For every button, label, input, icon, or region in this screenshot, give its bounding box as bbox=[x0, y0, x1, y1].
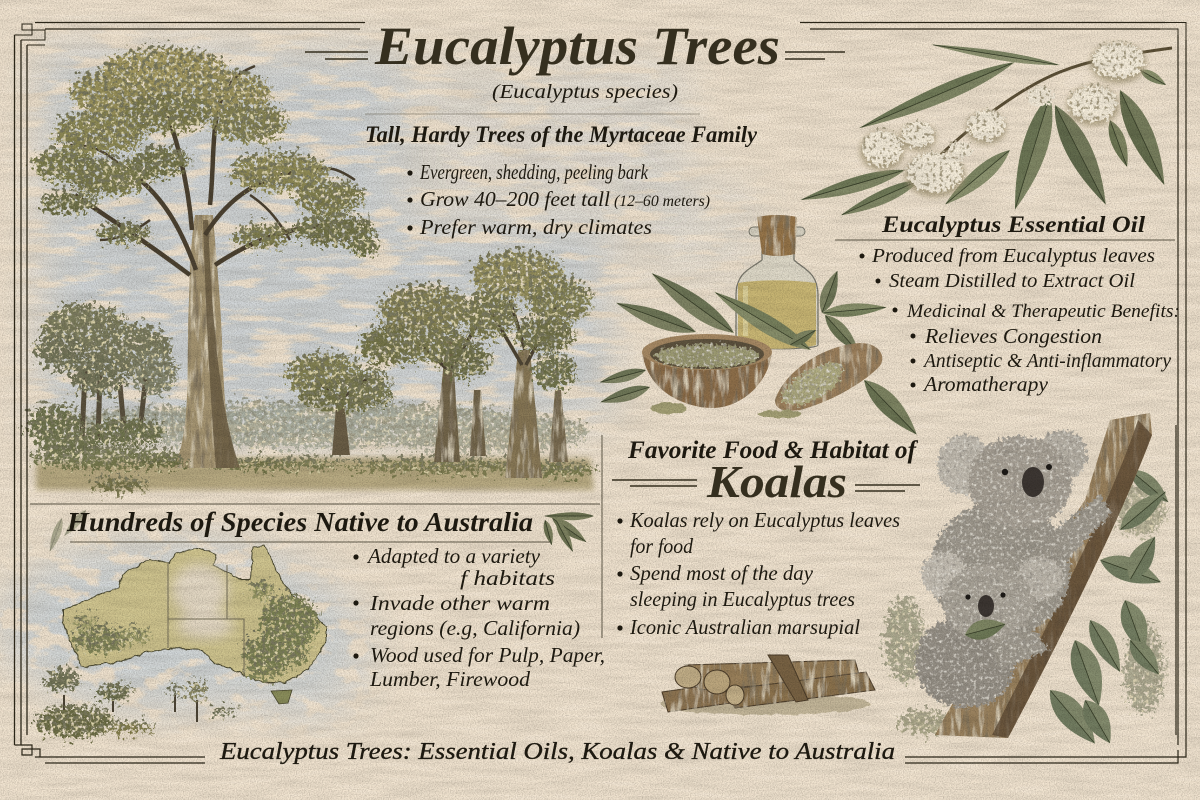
scattered seeds bbox=[650, 402, 802, 418]
branch bbox=[925, 48, 1172, 170]
text block: tall hardy trees: Evergreen, shedding, peeling bark bbox=[419, 160, 649, 184]
text block: species native to Australia: Invade other warm bbox=[369, 591, 550, 615]
text block: essential oil: Aromatherapy bbox=[922, 372, 1049, 396]
leaf sprig by heading bbox=[46, 508, 594, 554]
text block: essential oil: Antiseptic & Anti-inflammatory bbox=[922, 350, 1171, 372]
text block: species native to Australia: Lumber, Firewood bbox=[369, 667, 531, 691]
text block: tall hardy trees: Prefer warm, dry climates bbox=[419, 215, 652, 239]
sea wash bbox=[0, 526, 378, 728]
text block: essential oil: Produced from Eucalyptus leaves bbox=[871, 245, 1155, 267]
bottle bbox=[736, 215, 818, 349]
small landscape bbox=[35, 669, 237, 738]
text block: tall hardy trees bbox=[365, 122, 758, 239]
large eucalyptus bbox=[33, 48, 379, 468]
text block: species native to Australia bbox=[66, 507, 605, 691]
sky wash bbox=[24, 34, 749, 454]
trunk bbox=[935, 413, 1152, 738]
leaves bbox=[1041, 463, 1174, 751]
blossoms bbox=[862, 42, 1144, 192]
text block: essential oil: Relieves Congestion bbox=[924, 324, 1102, 348]
cork bbox=[757, 215, 797, 256]
text block: koalas: Koalas rely on Eucalyptus leaves bbox=[629, 508, 900, 532]
leaves bbox=[798, 40, 1176, 222]
illustration: eucalyptus landscape bbox=[27, 48, 598, 492]
text block: tall hardy trees: Grow 40–200 feet tall bbox=[420, 187, 610, 211]
map of Australia bbox=[35, 545, 326, 738]
ground bbox=[36, 458, 594, 490]
text block: koalas: Koalas bbox=[706, 456, 847, 507]
text block: species native to Australia: Adapted to a variety bbox=[366, 544, 541, 568]
mainland bbox=[63, 545, 326, 683]
scoop bbox=[775, 343, 882, 411]
inland cream bbox=[172, 564, 233, 639]
text block: species native to Australia: f habitats bbox=[460, 566, 555, 590]
shrubs at base bbox=[40, 432, 278, 468]
text block: tall hardy trees: Tall, Hardy Trees of the Myrtaceae Family bbox=[365, 122, 758, 147]
text block: koalas bbox=[612, 437, 920, 639]
front leaves bbox=[709, 285, 924, 441]
text block: species native to Australia: Wood used for Pulp, Paper, bbox=[370, 643, 605, 667]
illustration: eucalyptus branch with blossoms bbox=[798, 40, 1176, 222]
title: Eucalyptus Trees bbox=[374, 16, 780, 76]
blossom shadows bbox=[860, 43, 1146, 197]
footer caption: Eucalyptus Trees: Essential Oils, Koalas & Native to Australia bbox=[219, 739, 895, 765]
text block: essential oil: Eucalyptus Essential Oil bbox=[881, 212, 1146, 237]
vegetation bbox=[72, 581, 318, 679]
illustration: firewood logs bbox=[660, 655, 875, 715]
leaf held by koala bbox=[962, 614, 1008, 644]
text block: species native to Australia: Hundreds of Species Native to Australia bbox=[66, 507, 533, 537]
text block: essential oil bbox=[860, 212, 1180, 396]
text block: koalas: Iconic Australian marsupial bbox=[629, 615, 860, 639]
bowl bbox=[642, 334, 772, 408]
leaves behind bbox=[598, 266, 887, 409]
text block: essential oil: Steam Distilled to Extract Oil bbox=[889, 270, 1135, 292]
Tasmania bbox=[271, 690, 292, 704]
left tree group bbox=[27, 304, 177, 446]
text block: tall hardy trees: (12–60 meters) bbox=[614, 193, 710, 210]
text block: koalas: for food bbox=[630, 534, 693, 558]
illustration: essential oil still life bbox=[598, 215, 924, 441]
upper koala bbox=[930, 430, 1112, 638]
middle tree bbox=[287, 353, 393, 455]
text block: koalas: Spend most of the day bbox=[630, 561, 814, 585]
centre-right trees bbox=[360, 251, 592, 478]
illustration: koalas on tree bbox=[885, 413, 1174, 751]
text block: species native to Australia: regions (e.g, California) bbox=[370, 616, 580, 640]
lower koala bbox=[915, 552, 1063, 708]
state borders bbox=[168, 563, 244, 677]
distant forest band bbox=[40, 403, 590, 452]
text block: essential oil: Medicinal & Therapeutic Benefits: bbox=[906, 301, 1180, 322]
subtitle: (Eucalyptus species) bbox=[492, 81, 678, 103]
section rules bbox=[30, 114, 1175, 638]
text block: koalas: sleeping in Eucalyptus trees bbox=[630, 587, 855, 611]
background foliage bbox=[885, 484, 1166, 734]
text block: koalas: Favorite Food & Habitat of bbox=[627, 437, 919, 464]
